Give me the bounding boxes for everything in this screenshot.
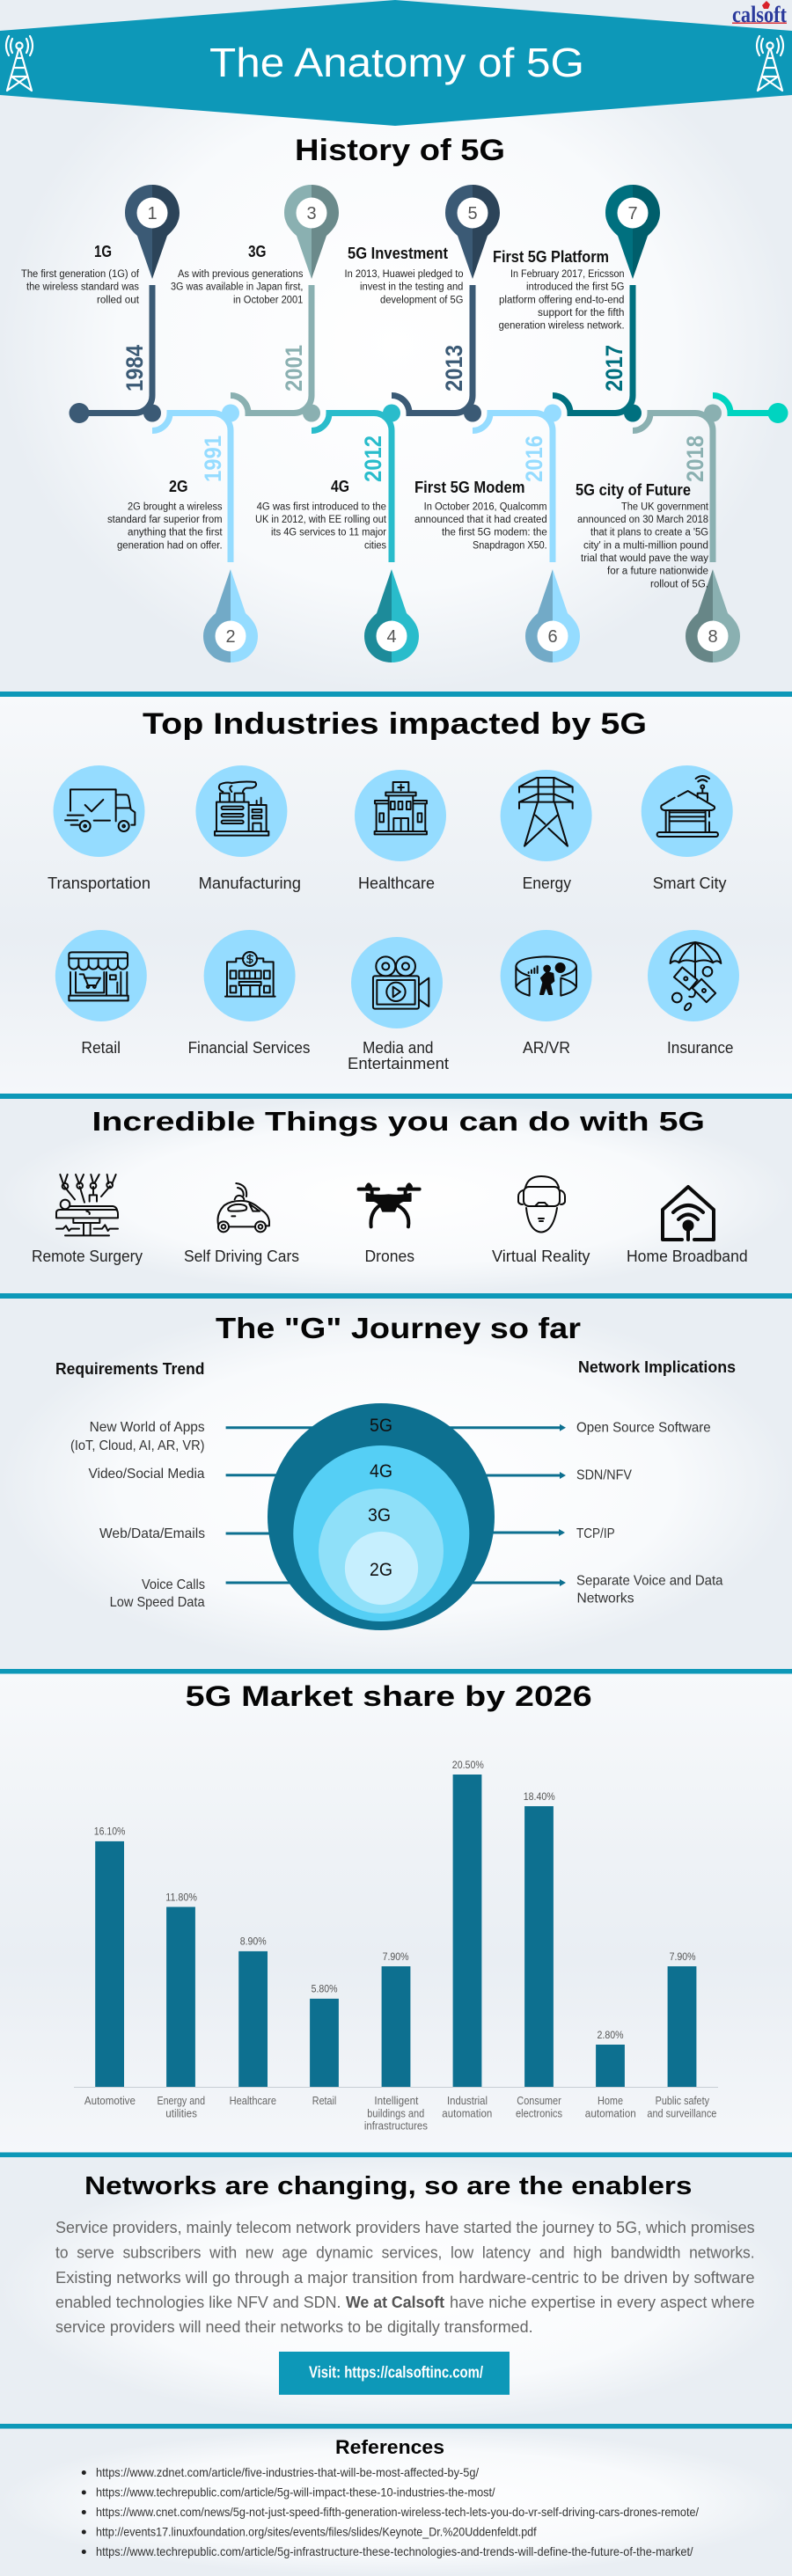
icon: right antenna tower [757, 36, 783, 91]
pin 2 [203, 569, 258, 662]
requirements labels: New World of Apps [90, 1420, 205, 1435]
pin 3 [284, 185, 339, 279]
icon: factory [215, 782, 268, 836]
text block: 5G Investment: invest in the testing and [360, 282, 463, 293]
text block: 4G: UK in 2012, with EE rolling out [255, 515, 387, 525]
paragraph: Existing networks will go through a major transition from hardware-centric to be driven by software [55, 2269, 755, 2287]
text block: 1G [21, 243, 140, 305]
icon: bank [225, 952, 275, 997]
pin 1: 1 [147, 204, 158, 223]
use case: Drones: Drones [364, 1248, 414, 1265]
2G layer [345, 1532, 418, 1605]
industry: Energy [501, 770, 592, 892]
text block: 4G: cities [364, 540, 386, 551]
nested generation diagram [268, 1403, 495, 1630]
timeline connectors [79, 285, 778, 562]
industry: Manufacturing [195, 765, 301, 892]
text block: 4G: its 4G services to 11 major [271, 528, 386, 538]
industry: Healthcare: Healthcare [358, 875, 435, 892]
pin 7: 7 [627, 204, 638, 223]
network implication labels [576, 1421, 723, 1606]
icon: storefront [69, 952, 128, 1000]
text block: First 5G Platform: generation wireless network. [499, 320, 625, 331]
text block: 4G [255, 478, 387, 551]
pin 1 [125, 185, 180, 279]
header banner [0, 0, 792, 126]
icon: truck [65, 789, 135, 831]
requirements labels: Video/Social Media [88, 1467, 205, 1482]
category labels: Healthcare [230, 2095, 276, 2107]
pin 2: 2 [225, 627, 236, 647]
category labels: Intelligent [374, 2095, 419, 2107]
icon: VR headset [518, 1176, 565, 1232]
category labels: Energy and [157, 2095, 205, 2107]
icon: drone [359, 1183, 420, 1226]
text block: 3G: in October 2001 [233, 295, 303, 305]
text block: 2G: 2G brought a wireless [128, 501, 223, 512]
button: visit: Visit: https://calsoftinc.com/ [309, 2364, 483, 2382]
text block: 3G: As with previous generations [178, 269, 304, 280]
heading: 5G Market share: 5G Market share by 2026 [186, 1680, 592, 1712]
industry: Financial Services: Financial Services [188, 1039, 310, 1057]
requirements labels: Web/Data/Emails [99, 1526, 205, 1541]
network implication labels: SDN/NFV [576, 1468, 632, 1483]
icon: self-driving car [217, 1183, 269, 1232]
pin 4 [364, 569, 419, 662]
heading: Incredible Things: Incredible Things you can do with 5G [92, 1106, 705, 1137]
icon: home wifi [663, 1187, 714, 1240]
text block: 4G: 4G [331, 478, 349, 495]
3G layer: 3G [368, 1505, 391, 1526]
category labels: Retail [312, 2095, 336, 2107]
text block: First 5G Modem: First 5G Modem [414, 479, 524, 496]
text block: First 5G Modem: Snapdragon X50. [473, 540, 547, 551]
bar value labels: 11.80% [165, 1891, 197, 1903]
text block: 2G: anything that the first [128, 528, 223, 538]
bar value labels: 18.40% [524, 1790, 555, 1803]
paragraph: to serve subscribers with new age dynamic services, low latency and high bandwidth networks. [55, 2244, 755, 2262]
paragraph: service providers will need their networks to be digitally transformed. [55, 2318, 533, 2336]
5G layer [268, 1403, 495, 1630]
bar value labels: 16.10% [94, 1826, 126, 1838]
text block: 5G city of Future [576, 481, 709, 589]
text block: 2G: generation had on offer. [117, 540, 223, 551]
category labels: Home [598, 2095, 623, 2107]
industry: Retail [55, 930, 147, 1057]
text block: First 5G Platform: support for the fifth [538, 308, 625, 318]
text block: First 5G Modem [414, 479, 547, 551]
industry: AR/VR: AR/VR [523, 1039, 570, 1057]
text block: 5G Investment: In 2013, Huawei pledged to [345, 269, 463, 280]
bar value labels: 7.90% [670, 1950, 696, 1963]
industry: Financial Services [188, 930, 310, 1057]
text block: 5G city of Future: 5G city of Future [576, 481, 691, 499]
icon: robotic surgery [56, 1175, 118, 1235]
text block: First 5G Platform [493, 248, 625, 331]
text block: 5G Investment: development of 5G [380, 295, 463, 305]
bar value labels: 2.80% [597, 2029, 624, 2041]
5G layer: 5G [370, 1416, 392, 1436]
requirements labels [70, 1420, 205, 1610]
reference list: https://www.techrepublic.com/article/5g-infrastructure-these-technologies-and-trends-will-define-the-future-of-the-market/ [96, 2544, 693, 2558]
text block: 5G city of Future: for a future nationwide [607, 567, 708, 577]
category labels: utilities [165, 2108, 197, 2120]
sub-heading: Requirements Trend: Requirements Trend [55, 1360, 204, 1378]
button: visit [279, 2352, 510, 2395]
connector lines [226, 1424, 566, 1586]
heading: References: References [335, 2436, 444, 2458]
use case: Home Broadband [627, 1187, 748, 1265]
heading: The G Journey: The "G" Journey so far [216, 1312, 581, 1344]
industry: Media and Entertainment [348, 937, 449, 1072]
use case: Home Broadband: Home Broadband [627, 1248, 748, 1265]
text block: First 5G Modem: the first 5G modem: the [442, 528, 547, 538]
use case: Remote Surgery [32, 1175, 143, 1265]
text block: 5G city of Future: The UK government [621, 501, 709, 512]
requirements labels: Low Speed Data [110, 1595, 205, 1610]
pin 3: 3 [306, 204, 317, 223]
sub-heading: Network Implications: Network Implications [578, 1358, 736, 1376]
text block: First 5G Platform: First 5G Platform [493, 248, 609, 266]
industry: Manufacturing: Manufacturing [199, 875, 301, 892]
industry: AR/VR [501, 930, 592, 1057]
heading: Networks are changing: Networks are changing, so are the enablers [84, 2172, 692, 2200]
text block: 5G Investment [345, 245, 463, 305]
text block: First 5G Modem: announced that it had created [414, 515, 547, 525]
reference list: http://events17.linuxfoundation.org/sites/events/files/slides/Keynote_Dr.%20Uddenfeldt.pdf [96, 2525, 537, 2539]
pin 6: 6 [547, 627, 558, 647]
pin 7 [605, 185, 660, 279]
bar value labels: 20.50% [452, 1759, 484, 1771]
industry: Media and Entertainment: Entertainment [348, 1055, 449, 1072]
paragraph [55, 2219, 755, 2336]
pin 4: 4 [386, 627, 397, 647]
2G layer: 2G [370, 1560, 392, 1580]
category labels: electronics [516, 2108, 562, 2120]
industry: Media and Entertainment: Media and [363, 1039, 433, 1057]
requirements labels: (IoT, Cloud, AI, AR, VR) [70, 1438, 204, 1453]
text block: 5G city of Future: announced on 30 March 2018 [577, 515, 708, 525]
pin 6 [525, 569, 580, 662]
use case: Virtual Reality: Virtual Reality [492, 1248, 590, 1265]
requirements labels: Voice Calls [142, 1577, 205, 1592]
text block: 4G: 4G was first introduced to the [257, 501, 386, 512]
industry: Transportation: Transportation [48, 875, 150, 892]
text block: 5G city of Future: rollout of 5G. [650, 579, 708, 589]
arrowheads [559, 1424, 566, 1586]
icon: umbrella and money [671, 942, 721, 1012]
year labels: 1991 [200, 435, 226, 482]
year labels: 2012 [360, 435, 386, 482]
icon: smart house [657, 776, 718, 837]
text block: 5G city of Future: city' in a multi-million pound [583, 540, 708, 551]
text block: 5G Investment: 5G Investment [348, 245, 448, 262]
title: The Anatomy of 5G [209, 40, 584, 85]
text block: 3G: 3G was available in Japan first, [171, 282, 303, 293]
bar value labels [94, 1759, 696, 2041]
year labels: 2013 [441, 345, 467, 392]
text block: 5G city of Future: trial that would pave the way [581, 553, 708, 564]
industry: Insurance: Insurance [667, 1039, 734, 1057]
industry: Energy: Energy [523, 875, 571, 892]
use case: Self Driving Cars: Self Driving Cars [184, 1248, 299, 1265]
text block: 3G: 3G [248, 243, 266, 260]
pin 8: 8 [708, 627, 718, 647]
reference list: https://www.cnet.com/news/5g-not-just-speed-fifth-generation-wireless-tech-lets-you-do-vr-self-driving-cars-drones-remote/ [96, 2505, 699, 2519]
4G layer [293, 1445, 469, 1621]
text block: 2G: 2G [169, 478, 188, 495]
paragraph: We at Calsoft [346, 2294, 444, 2311]
timeline [21, 185, 788, 662]
paragraph: have niche expertise in every aspect where [450, 2294, 755, 2311]
industry: Healthcare [355, 770, 446, 892]
industry: Retail: Retail [81, 1039, 121, 1057]
category labels: and surveillance [647, 2108, 716, 2120]
industry: Smart City: Smart City [653, 875, 727, 892]
bars [95, 1775, 696, 2087]
network implication labels: TCP/IP [576, 1526, 615, 1541]
text block: 1G: the wireless standard was [26, 282, 139, 293]
text block: First 5G Modem: In October 2016, Qualcomm [424, 501, 547, 512]
text block: First 5G Platform: platform offering end-to-end [499, 295, 625, 305]
text block: 3G [171, 243, 304, 305]
paragraph: Service providers, mainly telecom network providers have started the journey to 5G, which promises [55, 2219, 755, 2236]
category labels: automation [442, 2108, 492, 2120]
network implication labels: Networks [577, 1592, 634, 1606]
icon: video camera [373, 956, 429, 1009]
paragraph: enabled technologies like NFV and SDN. [55, 2294, 341, 2311]
reference list [82, 2465, 699, 2558]
3G layer [319, 1489, 444, 1614]
network implication labels: Open Source Software [576, 1421, 711, 1436]
bar chart: market share [74, 1759, 718, 2133]
use case: Drones [359, 1183, 420, 1265]
category labels: Automotive [84, 2095, 136, 2107]
industry: Smart City [642, 765, 733, 892]
category labels: Industrial [447, 2095, 488, 2107]
year labels: 2018 [682, 435, 708, 482]
category labels [84, 2095, 716, 2133]
icon: left antenna tower [6, 36, 33, 91]
use case: Remote Surgery: Remote Surgery [32, 1248, 143, 1265]
text block: 1G: 1G [94, 243, 112, 260]
heading: Top Industries impacted by 5G: Top Industries impacted by 5G [143, 707, 647, 741]
bar value labels: 7.90% [383, 1950, 409, 1963]
year labels: 2001 [281, 345, 307, 392]
heading: History of 5G: History of 5G [295, 134, 505, 167]
pin 5 [445, 185, 500, 279]
text block: 1G: The first generation (1G) of [21, 269, 140, 280]
text block: First 5G Platform: introduced the first 5G [526, 282, 625, 293]
pin 5: 5 [467, 204, 478, 223]
pin 8 [686, 569, 740, 662]
year labels [121, 345, 708, 482]
text block: 1G: rolled out [97, 295, 140, 305]
category labels: infrastructures [364, 2120, 428, 2133]
text block: 2G [107, 478, 223, 551]
industry: Insurance [648, 930, 739, 1057]
category labels: Public safety [656, 2095, 710, 2107]
text block: 5G city of Future: that it plans to create a '5G [590, 528, 708, 538]
year labels: 2016 [521, 435, 547, 482]
reference list: https://www.techrepublic.com/article/5g-will-impact-these-10-industries-the-most/ [96, 2485, 495, 2499]
icon: power pylon [519, 778, 573, 846]
bar value labels: 5.80% [312, 1983, 338, 1995]
year labels: 1984 [121, 345, 148, 392]
category labels: automation [585, 2108, 636, 2120]
network implication labels: Separate Voice and Data [576, 1574, 723, 1589]
timeline nodes [69, 403, 788, 423]
text block: 2G: standard far superior from [107, 515, 223, 525]
category labels: Consumer [517, 2095, 561, 2107]
icon: hospital [375, 782, 427, 834]
use case: Self Driving Cars [184, 1183, 299, 1265]
icon: AR/VR person [516, 956, 576, 996]
bar value labels: 8.90% [240, 1936, 267, 1948]
category labels: buildings and [367, 2108, 424, 2120]
axis [74, 2087, 718, 2088]
4G layer: 4G [370, 1461, 392, 1482]
use case: Virtual Reality [492, 1176, 590, 1265]
year labels: 2017 [601, 345, 627, 392]
reference list: https://www.zdnet.com/article/five-industries-that-will-be-most-affected-by-5g/ [96, 2465, 479, 2479]
text block: First 5G Platform: In February 2017, Ericsson [510, 269, 625, 280]
industry: Transportation [48, 765, 150, 892]
